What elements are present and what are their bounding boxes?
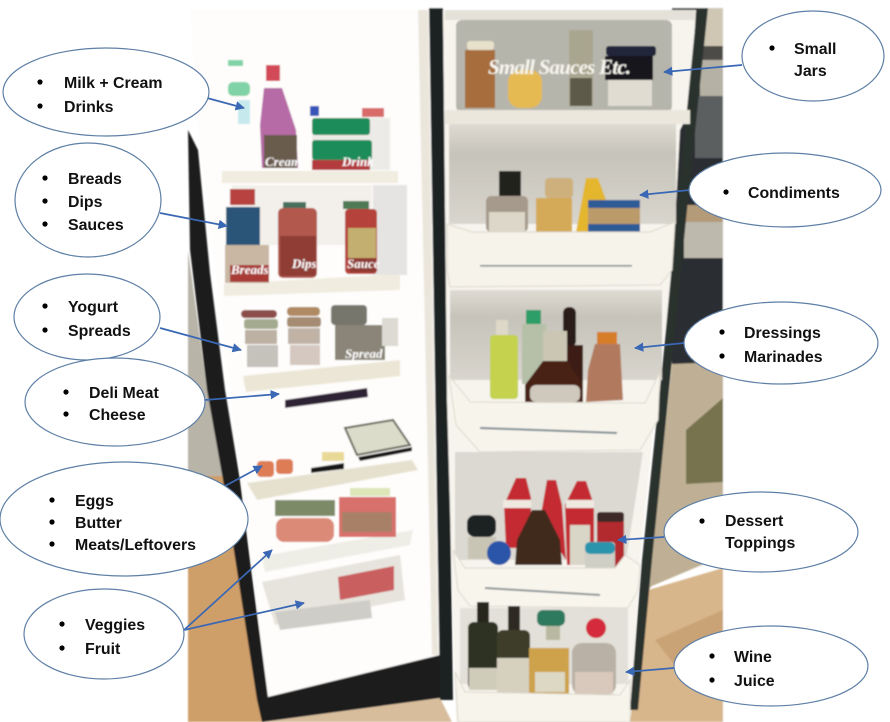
small sauces bin: Small Sauces Etc.: [488, 55, 631, 79]
callout: deli meat, cheese: Deli Meat: [89, 385, 159, 402]
wine bin front: [455, 672, 630, 722]
callout: eggs, butter, meats/leftovers: [0, 462, 248, 576]
dessert section: [455, 452, 643, 569]
butter and leftovers tray: [311, 420, 412, 473]
shelves left: [222, 171, 418, 572]
milk and cream bottles: Cream: [265, 154, 301, 169]
sauce jars: [343, 201, 380, 274]
drinks bin with green cans: Drink: [341, 154, 374, 169]
wine and juice section: [460, 602, 628, 695]
callout: wine, juice: [674, 626, 868, 706]
callout: deli meat, cheese: [25, 358, 205, 446]
dressing section: [450, 290, 662, 402]
callout: breads, dips, sauces: Dips: [68, 194, 103, 211]
dips jar: [278, 202, 317, 278]
kitchen background right: [630, 8, 723, 722]
callout: breads, dips, sauces: [15, 143, 161, 257]
condiment bin front: [447, 222, 675, 287]
spreads containers: Spread: [345, 346, 383, 361]
callout: wine, juice: Wine: [734, 649, 772, 666]
callout: small jars: [742, 11, 884, 101]
spreads containers: [331, 305, 398, 361]
meat drawer: [275, 488, 396, 542]
arrows: [160, 65, 742, 672]
black door gasket: [188, 8, 453, 722]
white band right of photo: [723, 0, 890, 722]
milk and cream bottles: [228, 60, 301, 169]
callout: milk + cream, drinks: Milk + Cream: [64, 75, 162, 92]
callout: veggies, fruit: Veggies: [85, 617, 145, 634]
callout: milk + cream, drinks: Drinks: [64, 99, 114, 116]
condiment section: [449, 124, 676, 232]
sauce jars: Sauce: [347, 256, 380, 271]
callout: dressings, marinades: Dressings: [744, 325, 821, 342]
callout: wine, juice: Juice: [734, 673, 775, 690]
callout: breads, dips, sauces: Breads: [68, 171, 122, 188]
callout: eggs, butter, meats/leftovers: Butter: [75, 515, 122, 532]
yogurt cups: [241, 307, 321, 367]
callout: veggies, fruit: Fruit: [85, 641, 121, 658]
breads bin: [225, 189, 269, 283]
callout: dressings, marinades: Marinades: [744, 349, 823, 366]
fruit and veggie drawer: [262, 555, 405, 630]
callout: eggs, butter, meats/leftovers: Meats/Leftovers: [75, 537, 196, 554]
callout: small jars: Jars: [794, 63, 827, 80]
callout: dessert toppings: Dessert: [725, 513, 784, 530]
dessert bin front: [453, 550, 640, 608]
left stainless door and floor: [188, 250, 452, 722]
white band above photo: [188, 0, 728, 8]
callout: eggs, butter, meats/leftovers: Eggs: [75, 493, 114, 510]
callout: breads, dips, sauces: Sauces: [68, 217, 124, 234]
callout: condiments: Condiments: [748, 185, 840, 202]
callout: yogurt, spreads: Spreads: [68, 323, 131, 340]
deli meat packet: [285, 388, 368, 408]
callout: dressings, marinades: [684, 302, 878, 384]
drinks bin with green cans: [310, 106, 390, 170]
callout: milk + cream, drinks: [3, 48, 209, 136]
callout: veggies, fruit: [24, 589, 184, 679]
eggs: [257, 459, 293, 477]
callout: small jars: Small: [794, 41, 836, 58]
dips jar: Dips: [291, 256, 317, 271]
callout: yogurt, spreads: [14, 274, 160, 360]
dressing bin front: [449, 372, 660, 452]
callout: deli meat, cheese: Cheese: [89, 407, 146, 424]
fridge compartment interior: [190, 10, 442, 697]
callout: yogurt, spreads: Yogurt: [68, 299, 119, 316]
callout: dessert toppings: [664, 492, 858, 572]
breads bin: Breads: [230, 262, 269, 277]
callout: condiments: [689, 153, 881, 227]
callout: dessert toppings: Toppings: [725, 535, 795, 552]
fridge door frame: [443, 8, 708, 722]
small sauces bin: [445, 10, 695, 124]
fridge photo: [188, 0, 890, 722]
